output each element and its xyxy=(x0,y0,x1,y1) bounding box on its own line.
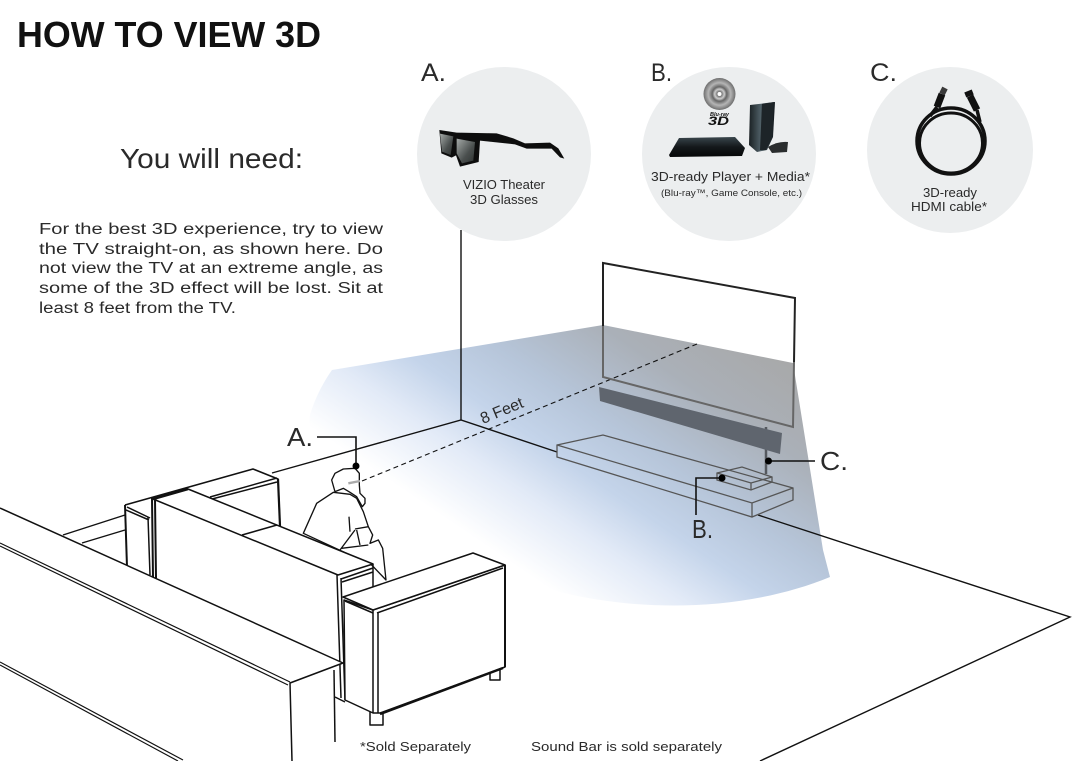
icon: Blu-ray 3D logo: 3D xyxy=(708,114,729,128)
icon: Blu-ray 3D logo: Blu-ray xyxy=(710,112,729,118)
panel: A glasses xyxy=(417,59,591,241)
text block: viewing advice xyxy=(39,221,384,317)
label: A: A. xyxy=(421,59,446,87)
panel: C HDMI cable xyxy=(867,59,1033,233)
media console xyxy=(557,435,793,517)
text block: viewing advice: For the best 3D experience, try to view xyxy=(39,221,384,238)
sound bar xyxy=(599,387,782,454)
caption: C: 3D-ready xyxy=(923,186,978,200)
callout: B xyxy=(692,474,726,544)
caption: A: VIZIO Theater xyxy=(463,178,545,192)
icon: HDMI cable xyxy=(917,88,985,174)
footnote: sold separately: *Sold Separately xyxy=(360,740,472,754)
far sofa section xyxy=(125,469,280,575)
icon: disc xyxy=(704,78,736,110)
near sofa back xyxy=(0,508,343,761)
text block: viewing advice: not view the TV at an extreme angle, as xyxy=(39,260,383,277)
footnote: sound bar: Sound Bar is sold separately xyxy=(531,740,723,754)
media player xyxy=(717,467,772,490)
text block: viewing advice: the TV straight-on, as shown here. Do xyxy=(39,241,383,258)
icon: Blu-ray 3D logo xyxy=(708,112,729,128)
title: HOW TO VIEW 3D xyxy=(17,14,321,55)
room outline xyxy=(63,230,1070,761)
caption: B: 3D-ready Player + Media* xyxy=(651,170,810,184)
callout: B: B. xyxy=(692,514,713,544)
light cone xyxy=(310,325,830,606)
caption: C: HDMI cable* xyxy=(911,200,987,214)
right sofa arm xyxy=(343,553,505,725)
caption: B xyxy=(651,170,810,199)
icon: 3D glasses xyxy=(439,130,564,167)
caption: C xyxy=(911,186,987,214)
label: C: C. xyxy=(870,59,897,87)
panel: B player and media xyxy=(642,59,816,241)
sight line distance xyxy=(362,344,697,481)
text block: viewing advice: some of the 3D effect will be lost. Sit at xyxy=(39,280,384,297)
text block: viewing advice: least 8 feet from the TV. xyxy=(39,300,236,317)
icon: game console xyxy=(749,102,788,153)
caption: B: (Blu-ray™, Game Console, etc.) xyxy=(661,188,802,199)
label: B: B. xyxy=(651,59,672,87)
label: 8 feet: 8 Feet xyxy=(478,395,527,428)
caption: A xyxy=(463,178,545,207)
callout: C: C. xyxy=(820,446,848,476)
icon: Blu-ray player xyxy=(669,137,745,157)
rear sofa leg xyxy=(490,668,500,680)
heading: you will need: You will need: xyxy=(120,143,303,174)
label and pointer: A: A. xyxy=(287,422,313,452)
person xyxy=(303,468,386,580)
right sofa leg xyxy=(370,712,383,725)
middle sofa section xyxy=(152,489,373,702)
callout: C xyxy=(765,446,848,476)
label and pointer: A xyxy=(287,422,360,470)
television xyxy=(603,263,795,474)
caption: A: 3D Glasses xyxy=(470,193,538,207)
